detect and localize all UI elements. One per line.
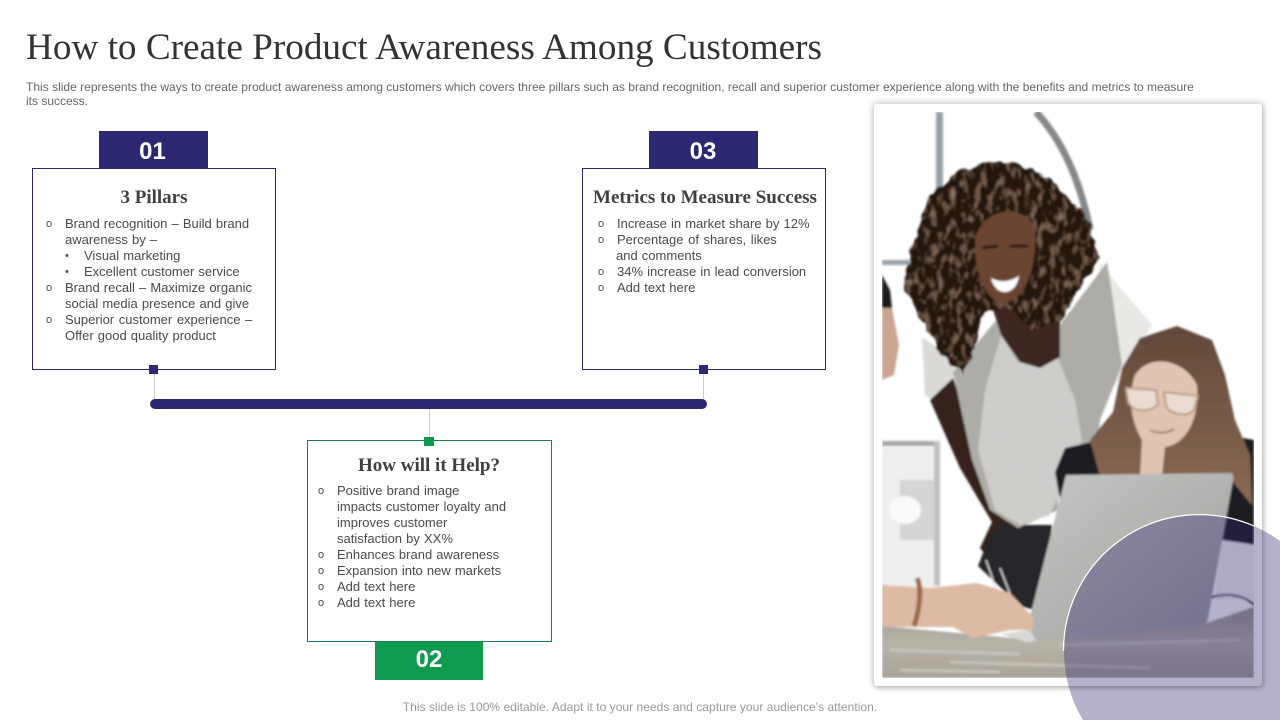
window frame vertical [936, 112, 943, 267]
hand at keyboard [882, 583, 1034, 638]
node square [424, 437, 434, 446]
node square [699, 365, 708, 374]
bullet list: impacts customer loyalty and [337, 499, 506, 514]
bullet list: and comments [616, 248, 702, 263]
bullet list: Brand recall – Maximize organic [65, 280, 252, 295]
laptop [1024, 473, 1233, 641]
timeline bar [150, 399, 707, 409]
lower window [882, 447, 934, 587]
decorative translucent circle [1062, 514, 1280, 720]
photo: two women at a laptop [882, 112, 1254, 678]
number tab 01 [99, 131, 208, 168]
bullet list: Add text here [337, 579, 415, 594]
paper and cord [1215, 540, 1254, 600]
bullet list: o [318, 581, 324, 593]
bullet list: • [65, 250, 69, 262]
bullet list [46, 216, 252, 343]
panel: 3 pillars [32, 131, 276, 374]
woman one: right sleeve [1100, 262, 1152, 400]
bullet list: Excellent customer service [84, 264, 240, 279]
connector line: pillar to timeline [154, 370, 155, 400]
bullet list: o [318, 597, 324, 609]
footer note: This slide is 100% editable. Adapt it to your needs and capture your audience's attention. [403, 700, 877, 714]
bullet list: Enhances brand awareness [337, 547, 499, 562]
panel: metrics to measure success [582, 131, 826, 374]
bullet list: satisfaction by XX% [337, 531, 453, 546]
bullet list: o [46, 282, 52, 294]
woman two: jacket [1055, 436, 1254, 545]
bullet list: o [598, 282, 604, 294]
window horizontal [882, 260, 910, 265]
heading: 3 Pillars [120, 187, 188, 208]
woman one: chest [990, 300, 1060, 368]
table [882, 607, 1254, 678]
title: How to Create Product Awareness Among Customers [26, 27, 822, 68]
bullet list: Expansion into new markets [337, 563, 501, 578]
bullet list: o [46, 314, 52, 326]
description text: its success. [26, 94, 88, 108]
bullet list: • [65, 266, 69, 278]
bullet list: Positive brand image [337, 483, 459, 498]
number tab 03: 03 [690, 138, 716, 165]
bullet list: improves customer [337, 515, 447, 530]
photo card [874, 104, 1262, 686]
woman two: glasses [1126, 388, 1198, 414]
description text [26, 80, 1194, 108]
bullet list: social media presence and give [65, 296, 249, 311]
bullet list: awareness by – [65, 232, 157, 247]
bullet list: Offer good quality product [65, 328, 216, 343]
woman one: shirt [978, 335, 1082, 525]
woman one: left sleeve [922, 337, 955, 402]
number tab 02: 02 [416, 646, 442, 673]
bullet list: o [598, 218, 604, 230]
left person's sleeve and arm [882, 275, 892, 310]
connector line: help to timeline [429, 409, 430, 439]
heading: Metrics to Measure Success [593, 187, 817, 208]
bullet list: o [46, 218, 52, 230]
bullet list: o [318, 485, 324, 497]
woman two: hair [1090, 326, 1252, 505]
bullet list: o [318, 565, 324, 577]
bullet list [598, 216, 810, 295]
bullet list: Percentage of shares, likes [617, 232, 777, 247]
woman one: dark arm [930, 378, 1030, 575]
woman one: trousers and chair wires [978, 525, 1052, 612]
bullet list [318, 483, 506, 610]
bullet list: o [318, 549, 324, 561]
bullet list: Add text here [617, 280, 695, 295]
bullet list: o [598, 234, 604, 246]
description text: This slide represents the ways to create product awareness among customers which covers three pillars such as brand recognition, recall and superior customer experience along with the benefits and metrics to measure [26, 80, 1194, 94]
number tab 02 [375, 642, 483, 680]
number tab 03 [649, 131, 758, 168]
window frame arc [1036, 112, 1090, 230]
heading: How will it Help? [358, 455, 500, 476]
node square [149, 365, 158, 374]
woman two: face and neck [1131, 361, 1197, 476]
woman one: hair [906, 160, 1100, 374]
bullet list: Superior customer experience – [65, 312, 252, 327]
woman one: face [975, 212, 1035, 304]
bullet list: Visual marketing [84, 248, 180, 263]
card with text [582, 168, 826, 370]
number tab 01: 01 [139, 138, 166, 165]
card with text [307, 440, 552, 642]
woman one: cardigan [953, 262, 1122, 528]
panel: how will it help [307, 437, 552, 680]
bullet list: Brand recognition – Build brand [65, 216, 249, 231]
card with text [32, 168, 276, 370]
bullet list: Increase in market share by 12% [617, 216, 810, 231]
bullet list: o [598, 266, 604, 278]
connector line: metrics to timeline [703, 370, 704, 400]
bullet list: Add text here [337, 595, 415, 610]
bullet list: 34% increase in lead conversion [617, 264, 806, 279]
